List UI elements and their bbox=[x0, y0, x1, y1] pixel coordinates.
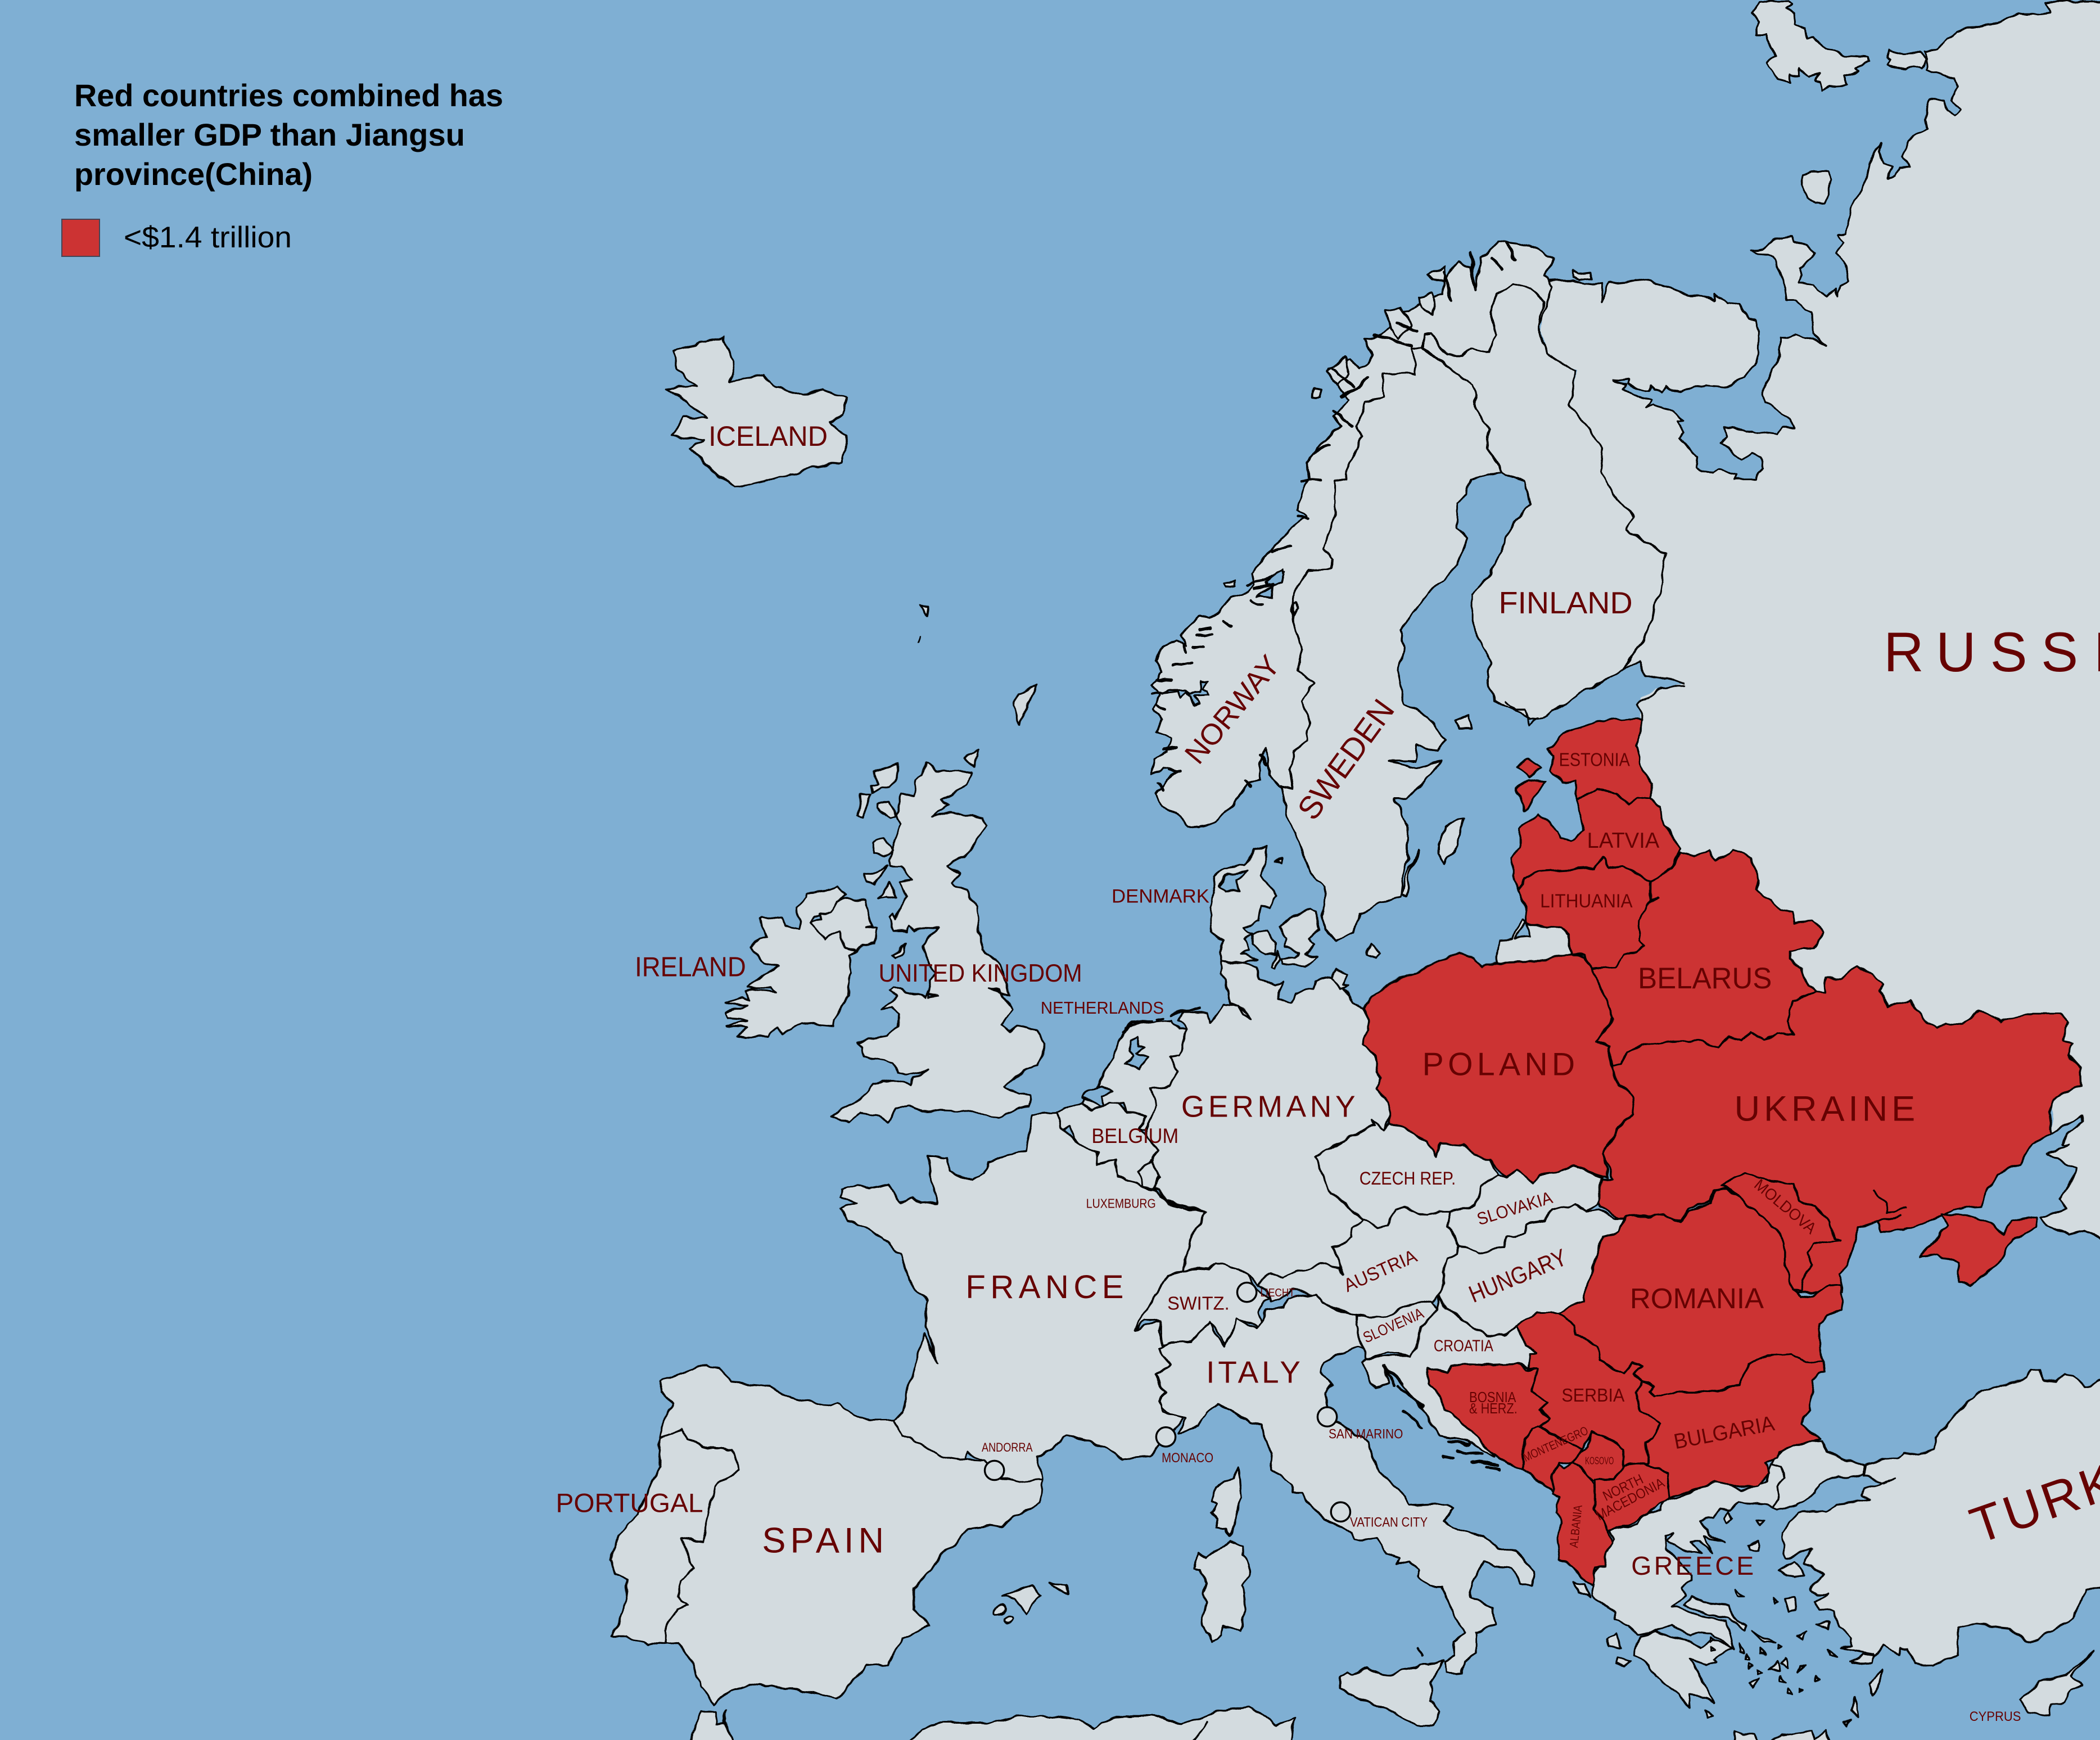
map: Baltic states, Belarus, Ukraine bbox=[1498, 718, 2081, 1293]
label: Latvia: LATVIA bbox=[1587, 829, 1659, 853]
label: Germany: GERMANY bbox=[1181, 1091, 1356, 1124]
Lemnos bbox=[1748, 1540, 1759, 1551]
Northern Ireland bbox=[809, 898, 877, 951]
Gotland bbox=[1439, 817, 1463, 864]
Algeria and Tunisia bbox=[902, 1706, 1294, 1740]
map: central Europe and Balkans bbox=[1355, 1167, 1842, 1584]
map: Italy and islands bbox=[1155, 1293, 1535, 1727]
Euboea bbox=[1683, 1597, 1746, 1631]
Paros bbox=[1769, 1661, 1780, 1671]
map: microstate markers bbox=[984, 1282, 1351, 1521]
label: Portugal: PORTUGAL bbox=[556, 1488, 703, 1518]
title line 2: smaller GDP than Jiangsu bbox=[74, 117, 465, 152]
title line 1: Red countries combined has bbox=[74, 78, 503, 113]
Greece mainland bbox=[1585, 1464, 1785, 1648]
label: Croatia: CROATIA bbox=[1434, 1337, 1493, 1355]
Crimea bbox=[1920, 1215, 2036, 1285]
Anatolia bbox=[1782, 1370, 2100, 1666]
map: British Isles bbox=[726, 604, 1045, 1122]
label: Hungary: HUNGARY bbox=[1465, 1244, 1571, 1308]
Germany bbox=[1147, 961, 1390, 1285]
label: Kosovo: KOSOVO bbox=[1585, 1455, 1614, 1467]
Montenegro bbox=[1523, 1427, 1583, 1495]
Finnish archipelago bbox=[1507, 703, 1538, 726]
Slovenia bbox=[1355, 1301, 1439, 1359]
Hiiumaa bbox=[1517, 760, 1541, 776]
Oland bbox=[1401, 849, 1418, 896]
label: Liechtenstein: LIECHT. bbox=[1260, 1287, 1297, 1299]
label: Netherlands: NETHERLANDS bbox=[1041, 998, 1164, 1018]
Zealand bbox=[1279, 909, 1319, 966]
label: Denmark: DENMARK bbox=[1112, 885, 1209, 907]
Menorca bbox=[1050, 1584, 1068, 1595]
Peloponnese bbox=[1633, 1632, 1732, 1709]
Estonia bbox=[1547, 718, 1653, 804]
Samothrace bbox=[1755, 1520, 1763, 1525]
Great Britain bbox=[832, 764, 1045, 1122]
Frisian islands bbox=[1122, 1008, 1200, 1033]
Skyros bbox=[1735, 1589, 1745, 1597]
Czech Republic bbox=[1315, 1121, 1498, 1227]
label: Belgium: BELGIUM bbox=[1091, 1124, 1178, 1147]
label: Estonia: ESTONIA bbox=[1559, 750, 1631, 771]
title line 3: province(China) bbox=[74, 156, 313, 192]
label: Sweden: SWEDEN bbox=[1290, 693, 1402, 826]
Faroe islands bbox=[921, 604, 928, 617]
label: Vatican City: VATICAN CITY bbox=[1350, 1515, 1428, 1530]
Sardinia bbox=[1195, 1541, 1249, 1642]
Adriatic islands bbox=[1384, 1366, 1500, 1468]
Russia land west of Urals bbox=[1605, 486, 2100, 784]
Rhodes bbox=[1869, 1669, 1884, 1695]
Lipari islands bbox=[1417, 1648, 1423, 1656]
marker: Liechtenstein bbox=[1237, 1282, 1257, 1302]
Lofoten islands bbox=[1327, 358, 1349, 386]
Rybachy islet bbox=[1572, 269, 1591, 281]
label: United Kingdom: UNITED KINGDOM bbox=[879, 959, 1082, 987]
marker: San Marino bbox=[1317, 1407, 1337, 1426]
legend bbox=[62, 219, 292, 256]
Faroe small islet bbox=[919, 636, 920, 643]
map of Europe bbox=[610, 2, 2100, 1740]
label: Switzerland: SWITZ. bbox=[1167, 1294, 1230, 1314]
Skye bbox=[877, 800, 895, 819]
label: Ireland: IRELAND bbox=[635, 952, 746, 982]
Cyclades islets bbox=[1711, 1597, 1850, 1725]
label: Belarus: BELARUS bbox=[1638, 962, 1772, 995]
Russia northern coastline bbox=[1550, 2, 2100, 479]
Jutland bbox=[1210, 846, 1277, 964]
Uist island bbox=[858, 795, 871, 817]
Sognefjord bbox=[1164, 680, 1209, 707]
Finland bbox=[1424, 283, 1667, 719]
France bbox=[840, 1114, 1205, 1482]
Ireland bbox=[726, 887, 856, 1037]
title bbox=[74, 78, 503, 192]
marker: Monaco bbox=[1156, 1427, 1176, 1447]
Gulf of Finland Russian coast bbox=[1623, 661, 1684, 684]
label: France: FRANCE bbox=[965, 1269, 1123, 1305]
Namsos fjord bbox=[1258, 586, 1272, 598]
Sicily bbox=[1340, 1659, 1443, 1727]
Samos bbox=[1817, 1623, 1830, 1629]
Bulgaria bbox=[1634, 1355, 1824, 1498]
marker: Vatican City bbox=[1331, 1502, 1351, 1521]
Serbia bbox=[1518, 1312, 1660, 1468]
Lithuania bbox=[1519, 858, 1657, 969]
Troms island bbox=[1418, 292, 1434, 314]
Trondheim fjord bbox=[1266, 569, 1284, 586]
Lolland bbox=[1272, 951, 1279, 968]
label: Cyprus: CYPRUS bbox=[1970, 1709, 2021, 1724]
Arctic Norwegian island bbox=[1428, 267, 1446, 281]
Shetland bbox=[1014, 686, 1037, 725]
map: Poland bbox=[1362, 952, 1633, 1182]
map: central Russia land fill bbox=[1605, 486, 2100, 784]
Croatia bbox=[1362, 1296, 1538, 1457]
map: Germany, Benelux and Denmark bbox=[1056, 846, 1390, 1285]
map: Turkey and Greece bbox=[1574, 1370, 2100, 1740]
Kefalonia bbox=[1618, 1658, 1629, 1666]
Lewis island bbox=[871, 764, 898, 793]
legend text: <$1.4 trillion bbox=[124, 221, 292, 254]
label: Finland: FINLAND bbox=[1498, 585, 1633, 620]
label: Luxembourg: LUXEMBURG bbox=[1086, 1196, 1156, 1211]
northern Norway fjords bbox=[1247, 243, 1515, 586]
Spain bbox=[660, 1365, 1042, 1703]
label: Spain: SPAIN bbox=[762, 1521, 884, 1561]
Vesteralen islands bbox=[1387, 309, 1412, 339]
label: Albania: ALBANIA bbox=[1567, 1504, 1585, 1548]
Slovakia bbox=[1448, 1167, 1604, 1253]
label: Andorra: ANDORRA bbox=[982, 1440, 1033, 1454]
Orkney bbox=[964, 751, 978, 767]
label: Monaco: MONACO bbox=[1162, 1450, 1213, 1466]
Russia land north bbox=[1541, 2, 2100, 516]
Norwegian coastal island bbox=[1312, 389, 1321, 398]
Isle of Man bbox=[892, 944, 904, 957]
map: southern Russia bbox=[1637, 675, 2100, 1242]
western Norway fjord strokes bbox=[1153, 585, 1272, 789]
Funen bbox=[1252, 931, 1275, 953]
Andros bbox=[1752, 1629, 1774, 1644]
Kos area bbox=[1850, 1653, 1876, 1662]
North Macedonia bbox=[1593, 1463, 1669, 1531]
Chios bbox=[1785, 1597, 1796, 1614]
label: Bulgaria: BULGARIA bbox=[1672, 1412, 1777, 1454]
Russia land south bbox=[1637, 675, 2100, 1242]
label: Serbia: SERBIA bbox=[1561, 1385, 1625, 1406]
Thasos bbox=[1724, 1511, 1732, 1522]
Sweden bbox=[1282, 349, 1503, 941]
Kosovo bbox=[1573, 1431, 1624, 1483]
legend swatch: red bbox=[62, 219, 100, 256]
label: Austria: AUSTRIA bbox=[1340, 1246, 1420, 1296]
Anholt bbox=[1275, 859, 1282, 864]
map: France, Iberia, Switzerland and North Africa bbox=[610, 1114, 1294, 1740]
Saaremaa bbox=[1517, 779, 1545, 811]
label: Romania: ROMANIA bbox=[1630, 1282, 1764, 1314]
Lefkada bbox=[1607, 1632, 1622, 1648]
Kaliningrad bbox=[1498, 919, 1571, 962]
map: Scandinavia bbox=[1151, 241, 1667, 941]
label: Greece: GREECE bbox=[1631, 1551, 1754, 1580]
Kythira bbox=[1704, 1709, 1713, 1718]
Hitra island bbox=[1225, 580, 1235, 586]
Kintyre bbox=[878, 883, 897, 898]
Ibiza bbox=[992, 1603, 1007, 1617]
Gulf of Finland head coast bbox=[1637, 686, 1684, 718]
Moldova bbox=[1722, 1174, 1839, 1292]
label: Bosnia and Herzegovina second line: & HERZ. bbox=[1469, 1400, 1518, 1417]
Curonian lagoon bbox=[1516, 921, 1530, 938]
Limfjord bbox=[1218, 870, 1249, 892]
Formentera bbox=[1003, 1616, 1013, 1622]
map: Iceland bbox=[666, 337, 846, 487]
Crete west bbox=[1732, 1730, 1759, 1740]
White Sea-side island bbox=[1802, 171, 1832, 204]
Karpathos bbox=[1850, 1698, 1858, 1716]
Belgium bbox=[1056, 1101, 1158, 1186]
label: Norway: NORWAY bbox=[1178, 649, 1286, 770]
label: North: NORTH bbox=[1600, 1471, 1646, 1504]
label: Lithuania: LITHUANIA bbox=[1540, 891, 1633, 912]
country labels bbox=[556, 421, 2100, 1724]
Norway bbox=[1151, 241, 1554, 829]
marker: Andorra bbox=[984, 1461, 1004, 1480]
label: San Marino: SAN MARINO bbox=[1329, 1426, 1403, 1441]
label: Moldova: MOLDOVA bbox=[1751, 1176, 1819, 1238]
Netherlands bbox=[1081, 1020, 1187, 1130]
Naxos bbox=[1780, 1656, 1789, 1668]
Swedish border lake bbox=[1292, 602, 1298, 617]
Azov and Black Sea coast of Russia bbox=[2040, 1117, 2100, 1242]
Romania bbox=[1557, 1188, 1842, 1396]
label: Italy: ITALY bbox=[1206, 1355, 1300, 1390]
Belarus bbox=[1591, 849, 1822, 1065]
map: Austria and Czech Republic bbox=[1259, 1121, 1498, 1318]
label: Macedonia: MACEDONIA bbox=[1593, 1475, 1667, 1524]
Mallorca bbox=[1003, 1585, 1041, 1614]
label: Montenegro: MONTENEGRO bbox=[1521, 1423, 1590, 1465]
Aland bbox=[1456, 714, 1472, 729]
Turkish Thrace bbox=[1771, 1440, 1863, 1509]
Dnieper estuary bbox=[1873, 1191, 1908, 1221]
Austria bbox=[1259, 1208, 1458, 1318]
Latvia bbox=[1512, 789, 1682, 889]
Corfu bbox=[1574, 1583, 1591, 1597]
Algeria-Tunisia border bbox=[1194, 1722, 1208, 1740]
Iceland outline bbox=[666, 337, 846, 487]
Cyprus bbox=[2021, 1652, 2093, 1715]
label: Ukraine: UKRAINE bbox=[1735, 1090, 1915, 1129]
label: Slovenia: SLOVENIA bbox=[1360, 1304, 1426, 1346]
Kolguev-side large Arctic island bbox=[1752, 2, 1869, 91]
Albania bbox=[1552, 1463, 1613, 1584]
Mull bbox=[874, 839, 892, 856]
label: Poland: POLAND bbox=[1422, 1047, 1575, 1083]
Luxembourg bbox=[1138, 1160, 1160, 1187]
Crete east bbox=[1765, 1730, 1830, 1740]
map: northern Russia and Arctic islands bbox=[1541, 2, 2100, 516]
Hungary bbox=[1439, 1204, 1625, 1335]
label: Slovakia: SLOVAKIA bbox=[1475, 1187, 1555, 1229]
Rugen island bbox=[1332, 968, 1348, 988]
small Arctic island east bbox=[1888, 50, 1927, 70]
Islay bbox=[865, 866, 888, 883]
Italy bbox=[1155, 1293, 1535, 1674]
Zeeland delta bbox=[1082, 1086, 1114, 1109]
Ukraine bbox=[1596, 966, 2081, 1293]
Switzerland bbox=[1136, 1263, 1268, 1346]
Portugal bbox=[610, 1431, 739, 1646]
label: Czech Republic: CZECH REP. bbox=[1360, 1168, 1456, 1188]
Bornholm bbox=[1368, 944, 1379, 957]
Bosnia and Herzegovina bbox=[1428, 1364, 1548, 1470]
IJsselmeer bbox=[1126, 1036, 1148, 1070]
map: southern Norway fjords bbox=[1153, 569, 1298, 789]
label: Iceland: ICELAND bbox=[708, 421, 828, 452]
Morocco bbox=[686, 1711, 737, 1740]
Lesbos bbox=[1778, 1561, 1806, 1578]
Corsica bbox=[1211, 1467, 1242, 1536]
label: Bosnia and Herzegovina: BOSNIA bbox=[1469, 1389, 1516, 1405]
Poland outline bbox=[1362, 952, 1633, 1182]
